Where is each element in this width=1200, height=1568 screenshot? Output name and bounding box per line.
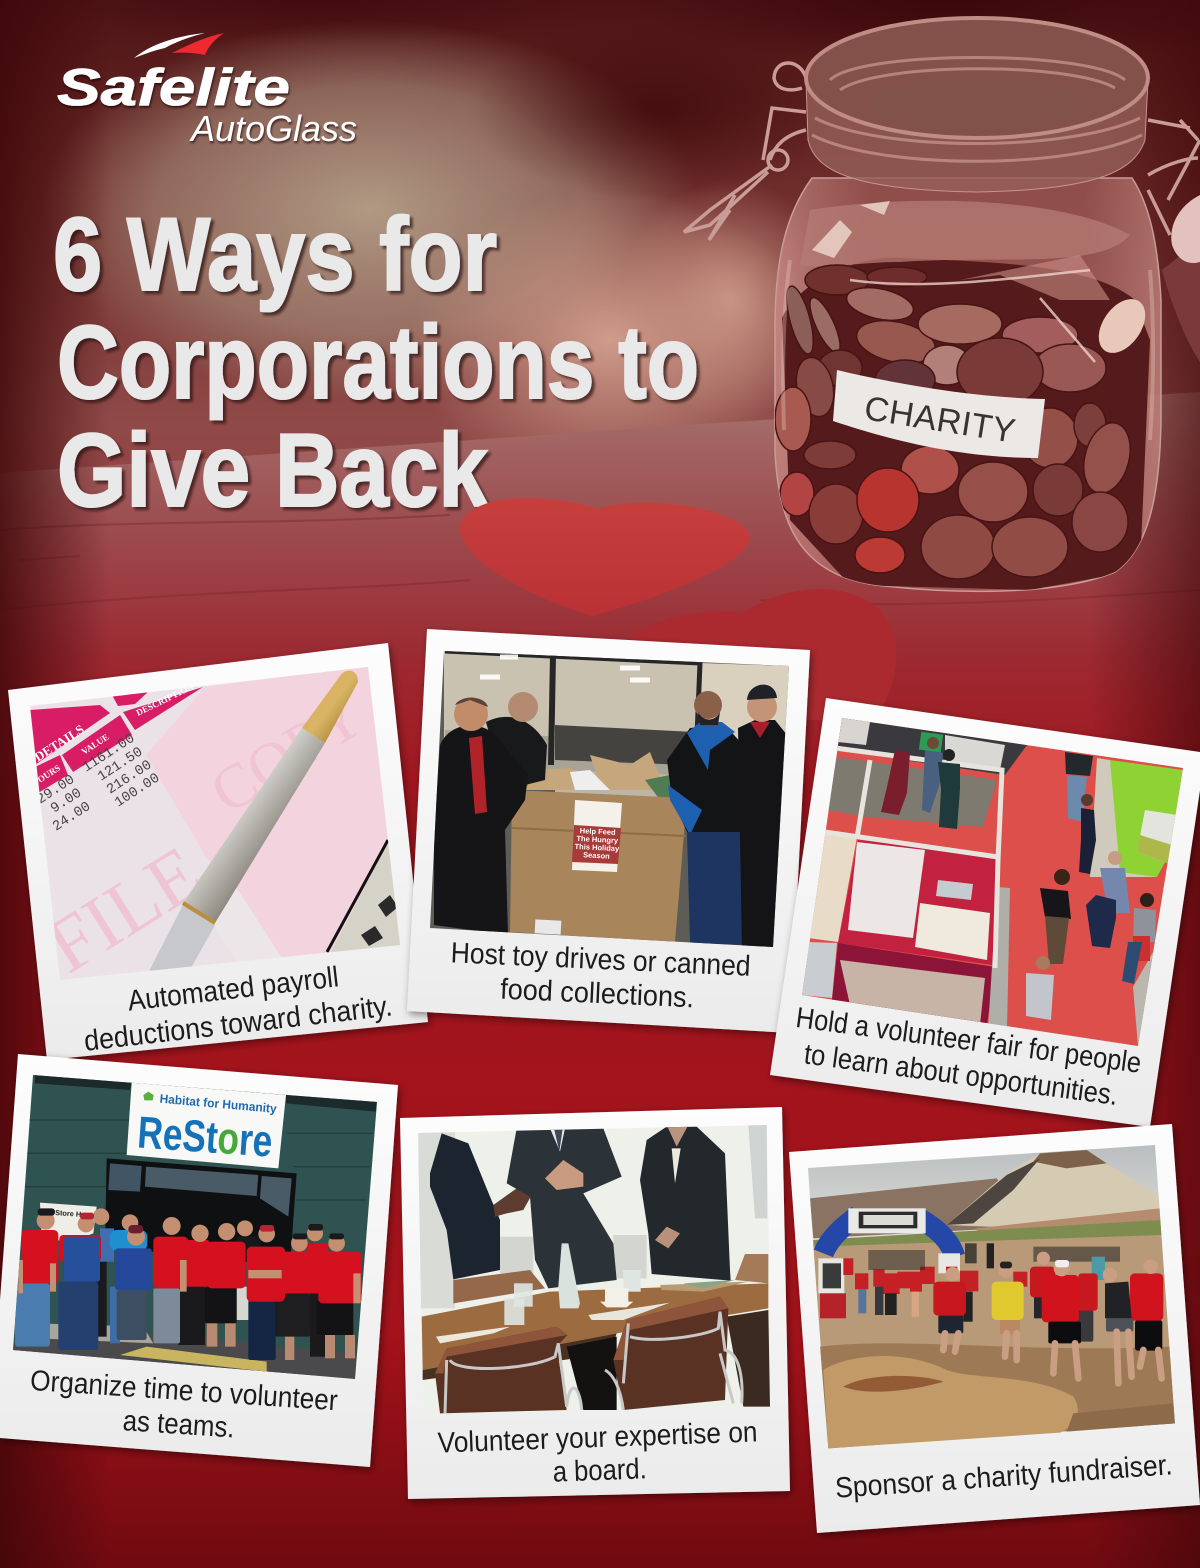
title — [53, 197, 699, 529]
photo: team with donation box — [425, 645, 795, 955]
polaroid: team volunteering — [0, 1054, 398, 1467]
photo: payroll sheet and pen: 29.00 — [34, 772, 78, 808]
booth visitors — [881, 737, 960, 829]
title: Give Back — [57, 413, 488, 529]
caption — [437, 1416, 759, 1493]
caption: Automated payroll — [126, 961, 340, 1018]
caption: Hold a volunteer fair for people — [794, 1002, 1143, 1080]
photo: payroll sheet and pen: 216.00 — [104, 757, 155, 798]
attendees — [1026, 752, 1156, 1020]
caption: Host toy drives or canned — [450, 937, 751, 983]
caption: deductions toward charity. — [82, 990, 394, 1058]
photo: payroll sheet and pen: 100.00 — [112, 770, 163, 811]
caption: food collections. — [500, 974, 695, 1014]
caption: Volunteer your expertise on — [437, 1416, 758, 1460]
caption: Sponsor a charity fundraiser. — [834, 1449, 1173, 1505]
photo: Habitat ReStore team: ReStore — [136, 1106, 274, 1167]
jar mouth — [806, 18, 1148, 138]
sign text: Help Feed — [580, 826, 616, 837]
sign text — [574, 828, 620, 859]
jar lid at right — [1162, 195, 1200, 362]
caption: a board. — [552, 1453, 647, 1489]
photo: payroll sheet and pen: 121.50 — [95, 744, 146, 785]
coins — [775, 201, 1155, 590]
caption: Organize time to volunteer — [29, 1365, 339, 1417]
caption: as teams. — [122, 1405, 236, 1444]
charity label: CHARITY — [862, 389, 1018, 451]
logo swoosh — [134, 33, 224, 58]
charity label — [833, 370, 1045, 458]
background runners — [843, 1243, 1120, 1322]
photo: aerial view of fair — [795, 710, 1195, 1055]
photo: payroll sheet and pen: DESCRIPTION — [134, 681, 196, 718]
photo: Habitat ReStore team: Habitat for Humanity — [159, 1092, 277, 1116]
polaroid: fundraiser — [789, 1124, 1200, 1533]
photo: payroll sheet and pen: OURS — [36, 763, 62, 785]
front runners — [933, 1252, 1163, 1383]
jar neck — [806, 80, 1148, 192]
logo subtitle: AutoGlass — [189, 108, 357, 149]
photo: payroll sheet and pen: 9.00 — [48, 785, 85, 817]
photo: Habitat ReStore team: Store Ho — [55, 1208, 86, 1219]
photo: payroll sheet and pen: 1161.00 — [80, 731, 138, 776]
logo wordmark: Safelite — [57, 59, 290, 117]
photo: payroll sheet and pen: FILE — [31, 828, 217, 989]
sign text: The Hungry — [576, 834, 619, 845]
photo: payroll sheet and pen: 24.00 — [50, 799, 94, 835]
charity jar — [684, 18, 1200, 591]
heart small — [460, 498, 750, 616]
title: Corporations to — [57, 305, 699, 421]
jar clasp wire — [684, 63, 1200, 240]
caption — [78, 956, 394, 1058]
caption — [449, 937, 751, 1017]
caption — [27, 1365, 339, 1451]
heart faded — [625, 589, 896, 720]
sign text: This Holiday — [574, 842, 620, 853]
title: 6 Ways for — [53, 197, 497, 313]
photo: payroll sheet and pen: VALUE — [80, 732, 111, 757]
photo: payroll sheet and pen: DETAILS — [31, 721, 87, 765]
jar inner ribs — [812, 58, 1142, 161]
polaroid: board — [400, 1107, 790, 1499]
sign text: Season — [583, 850, 610, 861]
photo: payroll sheet and pen: COPY — [199, 682, 376, 827]
polaroid: payroll — [8, 643, 428, 1060]
jar glass highlights — [783, 260, 1153, 440]
caption — [789, 1002, 1143, 1114]
jar body — [775, 178, 1161, 591]
photo: boardroom with suits — [417, 1123, 773, 1417]
photo: charity run in desert — [807, 1143, 1175, 1448]
photo: Habitat ReStore team — [7, 1070, 383, 1380]
polaroid: toy drive — [407, 629, 810, 1033]
photo: payroll sheet and pen — [30, 667, 400, 980]
polaroid: volunteer fair — [770, 698, 1200, 1127]
caption: to learn about opportunities. — [802, 1038, 1120, 1112]
volunteers — [15, 1208, 362, 1360]
logo — [57, 33, 357, 149]
